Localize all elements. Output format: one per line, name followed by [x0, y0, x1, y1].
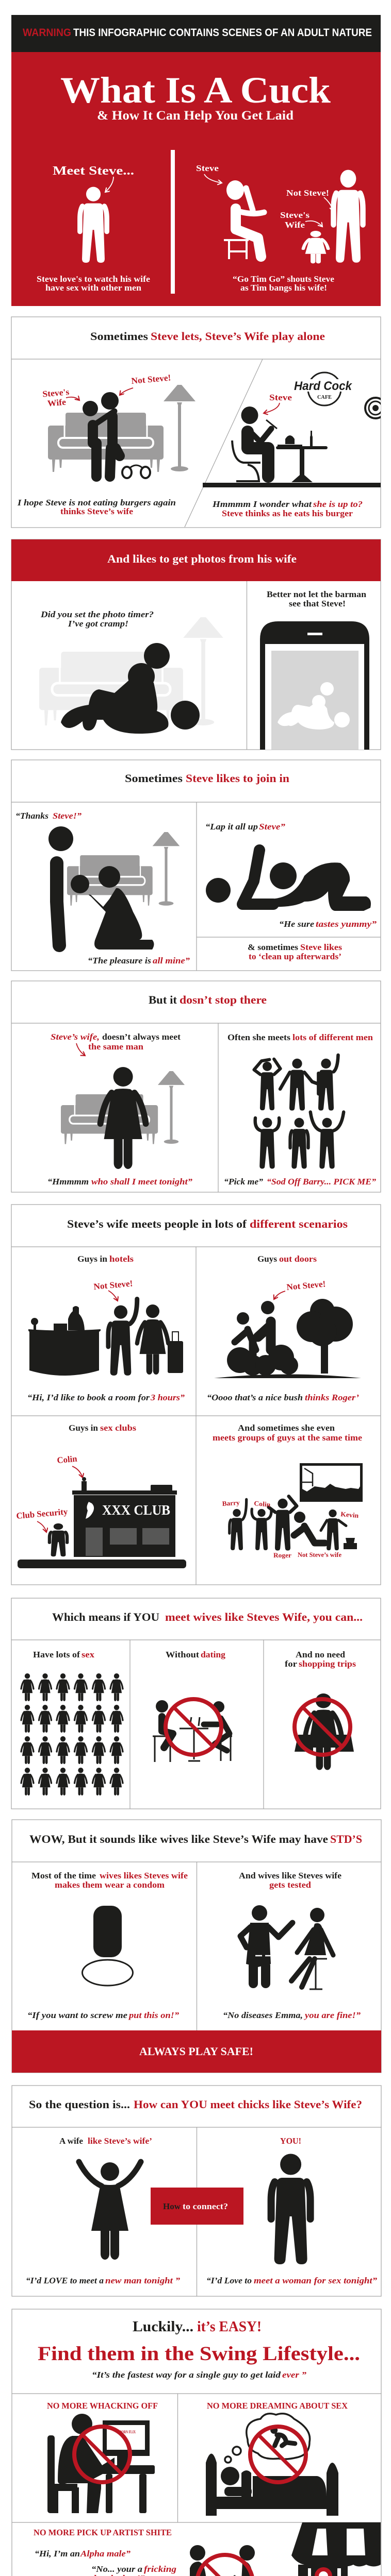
wife column: A wife [59, 2136, 83, 2146]
six men: “Pick me” [224, 1177, 264, 1187]
no dating icon: Without [166, 1650, 199, 1659]
captions: Hmmmm I wonder what [212, 499, 312, 509]
captions: “Go Tim Go” shouts Steve [233, 274, 334, 284]
group scene: meets groups of guys at the same time [213, 1433, 362, 1443]
doctor and patient: gets tested [269, 1880, 312, 1890]
captions: have sex with other men [45, 283, 142, 293]
divider [171, 150, 175, 294]
heading: How can YOU meet chicks like Steve’s Wife? [134, 2098, 362, 2111]
hotel scene: hotels [109, 1254, 134, 1264]
subtitle: & How It Can Help You Get Laid [97, 109, 294, 123]
hotel scene: 3 hours” [150, 1393, 185, 1402]
group scene: Roger [273, 1551, 291, 1559]
heading: But it [149, 993, 177, 1006]
street scene: “No... your a [91, 2564, 143, 2574]
doctor and patient [223, 1871, 361, 2020]
speech [40, 609, 154, 629]
club scene: Colin [57, 1454, 78, 1465]
captions: as Tim bangs his wife! [240, 283, 327, 293]
panel: photos from his wife [11, 539, 381, 750]
watching scene: Steve's [280, 210, 309, 220]
protection column with abstract icon: makes them wear a condom [55, 1880, 165, 1890]
protection column with abstract icon: put this on!” [128, 2010, 180, 2020]
dreaming scene [206, 2401, 348, 2516]
six men: Often she meets [227, 1032, 290, 1042]
woman in room: the same man [88, 1042, 144, 1052]
speech: Did you set the photo timer? [40, 609, 154, 619]
club scene [16, 1423, 186, 1568]
club scene: Guys in [69, 1423, 99, 1433]
heading [52, 1611, 363, 1623]
phone [260, 589, 369, 750]
protection column with abstract icon: “If you want to screw me [27, 2010, 127, 2020]
protection column with abstract icon [27, 1871, 188, 2020]
street scene: Alpha male” [80, 2549, 131, 2558]
heading: STD’S [330, 1833, 362, 1845]
no shopping icon: shopping trips [299, 1659, 356, 1669]
club scene: sex clubs [100, 1423, 136, 1433]
wife column [26, 2136, 181, 2285]
captions: thinks Steve’s wife [60, 506, 133, 516]
no shopping icon: And no need [296, 1650, 346, 1659]
no shopping icon: for [285, 1659, 297, 1669]
hotel scene: “Hi, I’d like to book a room for [27, 1393, 150, 1402]
phone: see that Steve! [289, 599, 346, 608]
cafe scene [203, 372, 386, 487]
heading: Luckily... [133, 2319, 193, 2335]
club scene: XXX CLUB [102, 1502, 170, 1518]
clean up caption: to ‘clean up afterwards’ [249, 952, 341, 961]
left scene with abstract figures: “The pleasure is [88, 956, 151, 965]
group scene: Kevin [340, 1510, 360, 1519]
heading: Find them in the Swing Lifestyle... [38, 2343, 360, 2365]
right scene with abstract figures: tastes yummy” [316, 919, 377, 929]
right scene with abstract figures: “He sure [279, 919, 314, 929]
hotel scene [27, 1254, 185, 1402]
panel: Steve's wife plays alone [11, 317, 386, 528]
panel: Steve joins in [11, 760, 381, 971]
left scene with abstract figures [15, 811, 190, 965]
grid of women: sex [82, 1650, 95, 1659]
wife column: “I’d LOVE to meet a [26, 2276, 104, 2285]
club scene: Club Security [16, 1506, 68, 1521]
six men: lots of different men [292, 1032, 373, 1042]
heading: meet wives like Steves Wife, you can... [165, 1611, 363, 1623]
clean up caption: & sometimes [248, 942, 298, 952]
heading: “It’s the fastest way for a single guy to get laid [92, 2370, 281, 2380]
outdoor scene: Guys [257, 1254, 277, 1264]
woman in room: Steve’s wife, [51, 1032, 100, 1042]
outdoor scene: out doors [279, 1254, 317, 1264]
outdoor scene [207, 1254, 361, 1402]
you column [206, 2136, 378, 2285]
captions: Steve love's to watch his wife [37, 274, 150, 284]
street scene: “Hi, I’m an [35, 2549, 80, 2558]
meet steve: Meet Steve... [53, 164, 134, 178]
protection column with abstract icon: Most of the time [31, 1871, 96, 1880]
heading: Steve likes to join in [186, 772, 289, 785]
warning text: WARNING [23, 27, 71, 39]
outdoor scene: “Oooo that’s a nice bush [207, 1393, 303, 1402]
group scene [213, 1423, 363, 1559]
heading: it’s EASY! [197, 2319, 262, 2335]
you column: “I’d Love to [206, 2276, 252, 2285]
clean up caption: Steve likes [300, 942, 342, 952]
cafe scene: Hard Cock [294, 379, 353, 393]
clean up caption [248, 942, 342, 961]
heading: So the question is... [29, 2098, 130, 2111]
panel: different scenarios [11, 1205, 381, 1585]
street scene: fricking [144, 2564, 177, 2574]
computer scene [47, 2401, 158, 2513]
group scene: Colin [254, 1499, 271, 1509]
heading: ever ” [282, 2370, 307, 2380]
connect box [151, 2188, 243, 2225]
heading [149, 993, 267, 1006]
captions: I hope Steve is not eating burgers again [17, 498, 176, 507]
doctor and patient: you are fine!” [304, 2010, 361, 2020]
outdoor scene: Not Steve! [286, 1279, 326, 1292]
heading: Steve lets, Steve’s Wife play alone [151, 330, 325, 343]
connect box: to connect? [183, 2201, 228, 2211]
you column: YOU! [280, 2136, 301, 2146]
panel: which means if you [11, 1598, 381, 1809]
heading: different scenarios [250, 1217, 348, 1230]
faded room with two abstract figures [39, 617, 223, 734]
heading [29, 2098, 362, 2111]
street scene: NO MORE PICK UP ARTIST SHITE [34, 2528, 172, 2537]
six men: “Sod Off Barry... PICK ME” [267, 1177, 377, 1187]
woman in room: who shall I meet tonight” [91, 1177, 193, 1187]
watching scene [196, 163, 363, 263]
left scene with abstract figures: Steve!” [53, 811, 82, 821]
group scene: Not Steve’s wife [298, 1551, 341, 1558]
panel: it doesn't stop there [11, 981, 381, 1192]
left scene with abstract figures: “Thanks [15, 811, 48, 821]
panel: swing lifestyle benefits [12, 2309, 381, 2576]
doctor and patient: And wives like Steves wife [239, 1871, 341, 1880]
group scene: And sometimes she even [238, 1423, 335, 1433]
you column: meet a woman for sex tonight” [254, 2276, 378, 2285]
woman in room [47, 1032, 193, 1187]
hotel scene: Not Steve! [93, 1278, 133, 1292]
dreaming scene: NO MORE DREAMING ABOUT SEX [207, 2401, 348, 2411]
phone: Better not let the barman [267, 589, 367, 599]
right scene with abstract figures [205, 822, 377, 929]
sofa scene [42, 372, 196, 478]
panel: the question [12, 2086, 381, 2296]
always play safe band: ALWAYS PLAY SAFE! [139, 2045, 253, 2058]
sofa scene: Not Steve! [131, 372, 171, 386]
heading: Sometimes [125, 772, 183, 785]
sofa scene: Steve's [42, 387, 70, 399]
no dating icon [153, 1650, 232, 1762]
captions: Steve thinks as he eats his burger [222, 509, 353, 518]
computer scene: PORN FLIX [120, 2430, 136, 2434]
cafe scene: CAFE [317, 395, 332, 400]
six men [224, 1032, 377, 1187]
heading: Which means if YOU [52, 1611, 159, 1623]
heading [67, 1217, 348, 1230]
speech: I’ve got cramp! [68, 619, 128, 629]
hotel scene: Guys in [77, 1254, 108, 1264]
always play safe band [12, 2030, 381, 2073]
title: What Is A Cuck [60, 70, 331, 111]
heading: And likes to get photos from his wife [107, 552, 297, 565]
group scene: Barry [222, 1499, 240, 1507]
panel: warning header and title [11, 15, 381, 306]
watching scene: Wife [285, 220, 305, 230]
grid of women [21, 1650, 123, 1795]
computer scene: NO MORE WHACKING OFF [47, 2401, 158, 2411]
meet steve [53, 164, 134, 263]
left scene with abstract figures: all mine” [153, 956, 190, 965]
cafe scene: Steve [269, 393, 292, 402]
connect box: How [163, 2201, 181, 2211]
street scene [12, 2522, 381, 2576]
captions [37, 274, 334, 293]
heading: WOW, But it sounds like wives like Steve’s Wife may have [29, 1833, 328, 1845]
no dating icon: dating [201, 1650, 226, 1659]
heading: Sometimes [90, 330, 148, 343]
no shopping icon [285, 1650, 356, 1770]
wife column: new man tonight ” [105, 2276, 181, 2285]
right scene with abstract figures: Steve” [259, 822, 286, 832]
heading [38, 2319, 360, 2380]
watching scene: Steve [196, 163, 219, 173]
captions: she is up to? [313, 499, 363, 509]
heading: Steve’s wife meets people in lots of [67, 1217, 247, 1230]
heading: dosn’t stop there [180, 993, 267, 1006]
panel: STDs [12, 1820, 381, 2073]
watching scene: Not Steve! [286, 188, 329, 198]
sofa scene: Wife [47, 397, 67, 409]
grid of women: Have lots of [33, 1650, 80, 1659]
wife column: like Steve’s wife’ [88, 2136, 152, 2146]
right scene with abstract figures: “Lap it all up [205, 822, 258, 832]
protection column with abstract icon: wives likes Steves wife [100, 1871, 188, 1880]
heading [125, 772, 289, 785]
woman in room: “Hmmmm [47, 1177, 89, 1187]
captions [17, 498, 363, 518]
outdoor scene: thinks Roger’ [305, 1393, 359, 1402]
doctor and patient: “No diseases Emma, [223, 2010, 303, 2020]
woman in room: doesn’t always meet [102, 1032, 181, 1042]
heading [90, 330, 325, 343]
